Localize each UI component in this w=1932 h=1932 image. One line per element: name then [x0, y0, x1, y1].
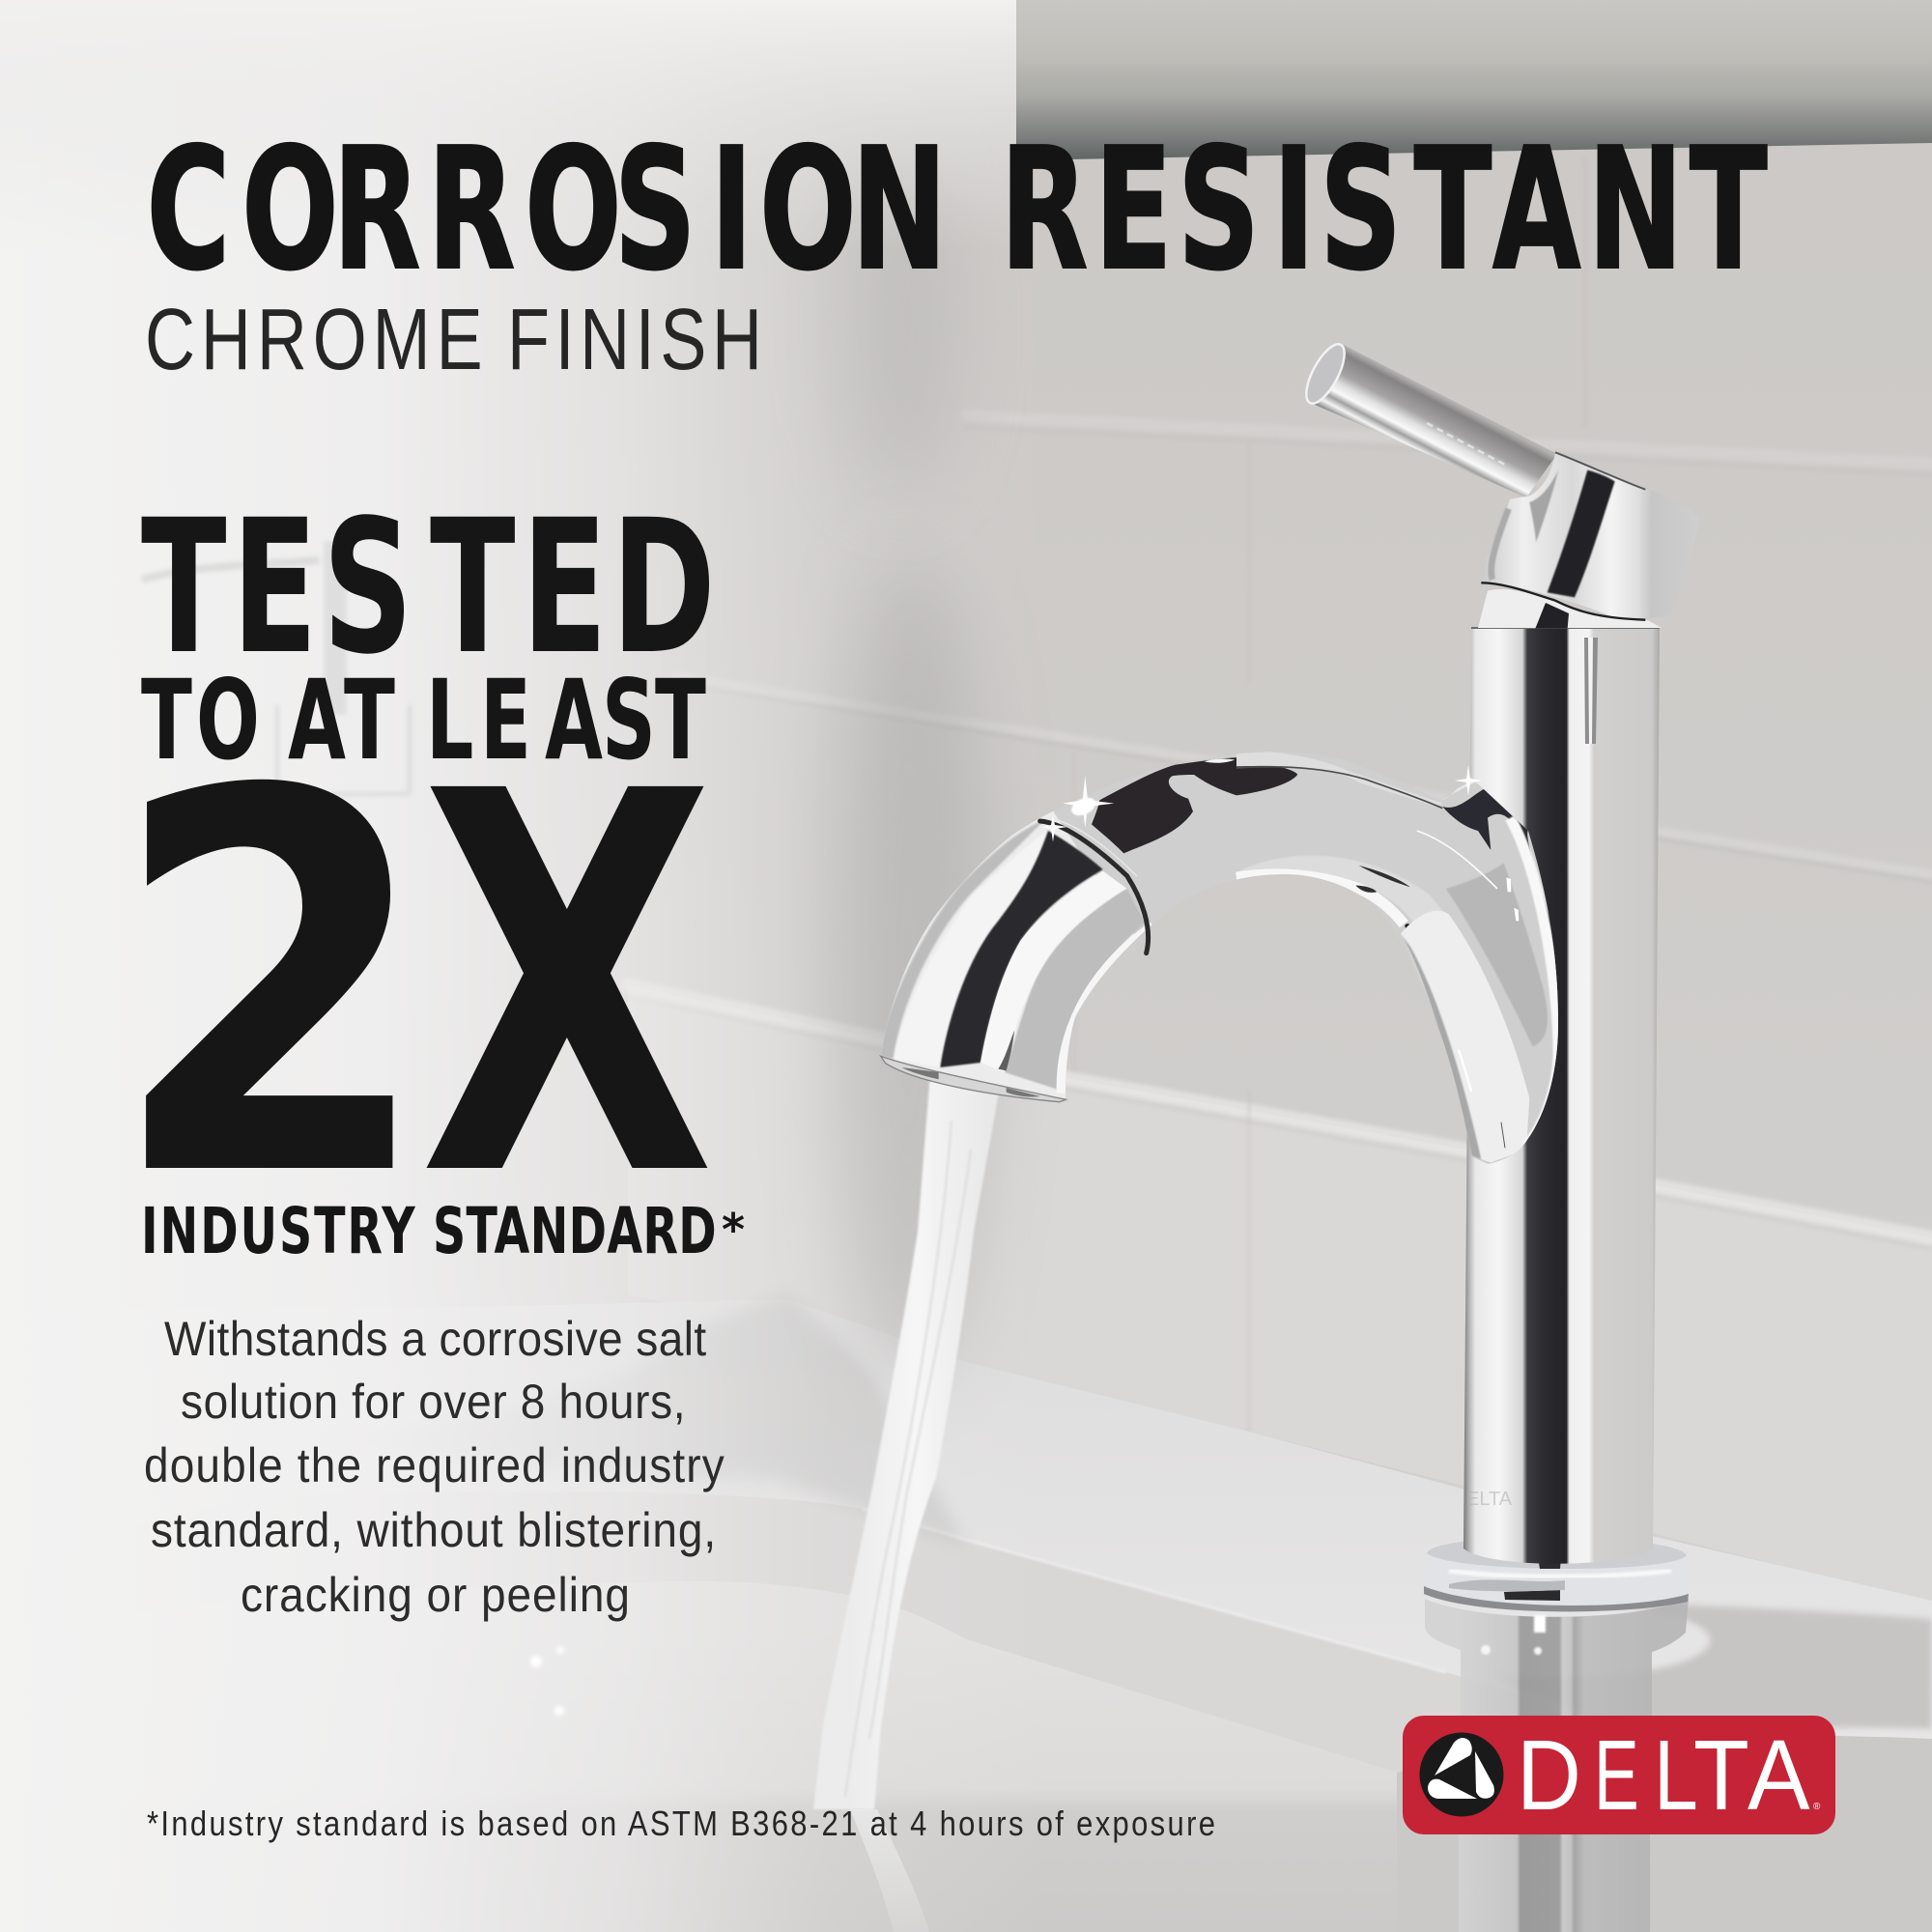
delta logo — [1403, 1716, 1835, 1834]
arch section reflections — [1191, 734, 1562, 1162]
bright lower front — [1401, 911, 1529, 1162]
nozzle section (left of seam) — [881, 811, 1151, 1098]
underside silver band — [1241, 856, 1442, 922]
delta wordmark: A — [1747, 1720, 1810, 1832]
handle neck — [1478, 589, 1662, 629]
industry standard: * — [722, 1204, 745, 1256]
counter reflection of faucet — [1425, 1599, 1689, 1932]
lever handle — [1299, 339, 1557, 497]
body text: cracking or peeling — [241, 1569, 630, 1622]
delta wordmark: D — [1517, 1719, 1581, 1831]
delta wordmark: L — [1654, 1719, 1698, 1831]
handle block — [1480, 452, 1700, 620]
junction sparkle — [1455, 765, 1482, 796]
dark junction reflection — [1443, 789, 1554, 952]
bright outer band — [1510, 818, 1558, 1147]
delta wordmark: ® — [1813, 1802, 1821, 1812]
delta wordmark: E — [1594, 1719, 1639, 1831]
central shadow band — [831, 551, 985, 1381]
water streaks — [845, 1121, 971, 1797]
subheading: chrome finish: CHROME — [145, 291, 483, 388]
sink basin — [0, 1581, 1397, 1932]
heading line: corrosion resistant: RESISTANT — [1000, 113, 1768, 308]
delta triangle emblem — [1420, 1733, 1503, 1816]
claim block: tested to at least 2x — [109, 479, 745, 1293]
counter deck — [0, 1299, 1932, 1932]
grout lines — [628, 159, 1932, 1432]
2x — [109, 682, 715, 1293]
faint towel bar and fixtures — [142, 541, 410, 794]
deck shadow of faucet — [1468, 1604, 1932, 1729]
sink sparkles — [530, 1646, 564, 1716]
2x: 2 — [109, 682, 433, 1292]
column body — [1463, 628, 1660, 1564]
water stream — [813, 1072, 1001, 1932]
mirror edge at top right — [1016, 0, 1932, 160]
tested: TESTED — [141, 479, 716, 696]
body text: standard, without blistering, — [151, 1504, 716, 1557]
subheading: chrome finish: FINISH — [507, 291, 762, 388]
industry standard: INDUSTRY — [141, 1194, 416, 1268]
ledge curve shading — [290, 1293, 966, 1546]
faucet — [863, 339, 1700, 1932]
lit pool beneath base — [1420, 1604, 1710, 1677]
counter edge highlight — [863, 1509, 1446, 1672]
red badge — [1403, 1716, 1835, 1834]
lower wall tile brightness — [628, 985, 1932, 1604]
industry standard: STANDARD — [433, 1194, 717, 1268]
industry standard — [141, 1194, 745, 1268]
brand mark etched on column: ELTA — [1466, 1489, 1513, 1510]
delta wordmark: T — [1693, 1719, 1749, 1831]
spout reflections — [863, 734, 1562, 1162]
column highlights — [1471, 628, 1660, 744]
heading line: corrosion resistant: CORROSION — [147, 113, 947, 308]
body text — [144, 1313, 724, 1622]
footnote: *Industry standard is based on ASTM B368-21 at 4 hours of exposure — [147, 1805, 1215, 1844]
left white wash — [0, 0, 1043, 1932]
body text: double the required industry — [144, 1439, 724, 1492]
pull-down seam — [1040, 818, 1149, 953]
base ring — [1424, 1538, 1689, 1611]
aerator mouth — [881, 1056, 1065, 1102]
2x: X — [419, 683, 715, 1293]
lever end cap — [1299, 339, 1351, 409]
silver inner reflection — [1446, 863, 1548, 1046]
counter front face — [0, 1492, 1604, 1773]
column shoulder — [1440, 778, 1477, 802]
title — [145, 113, 1768, 388]
heading line: corrosion resistant — [147, 113, 1768, 308]
delta wordmark — [1517, 1719, 1821, 1832]
upper dark reflection — [1092, 757, 1236, 854]
sparkles on spout — [1041, 776, 1114, 842]
to at least: TO AT LEAST — [141, 657, 706, 784]
body text: Withstands a corrosive salt — [164, 1313, 706, 1366]
subheading: chrome finish — [145, 291, 762, 388]
water reflection in basin — [850, 1809, 929, 1932]
top wash — [0, 0, 1016, 251]
body text: solution for over 8 hours, — [181, 1376, 686, 1429]
counter right lower — [1397, 1712, 1932, 1932]
spout — [863, 734, 1562, 1164]
